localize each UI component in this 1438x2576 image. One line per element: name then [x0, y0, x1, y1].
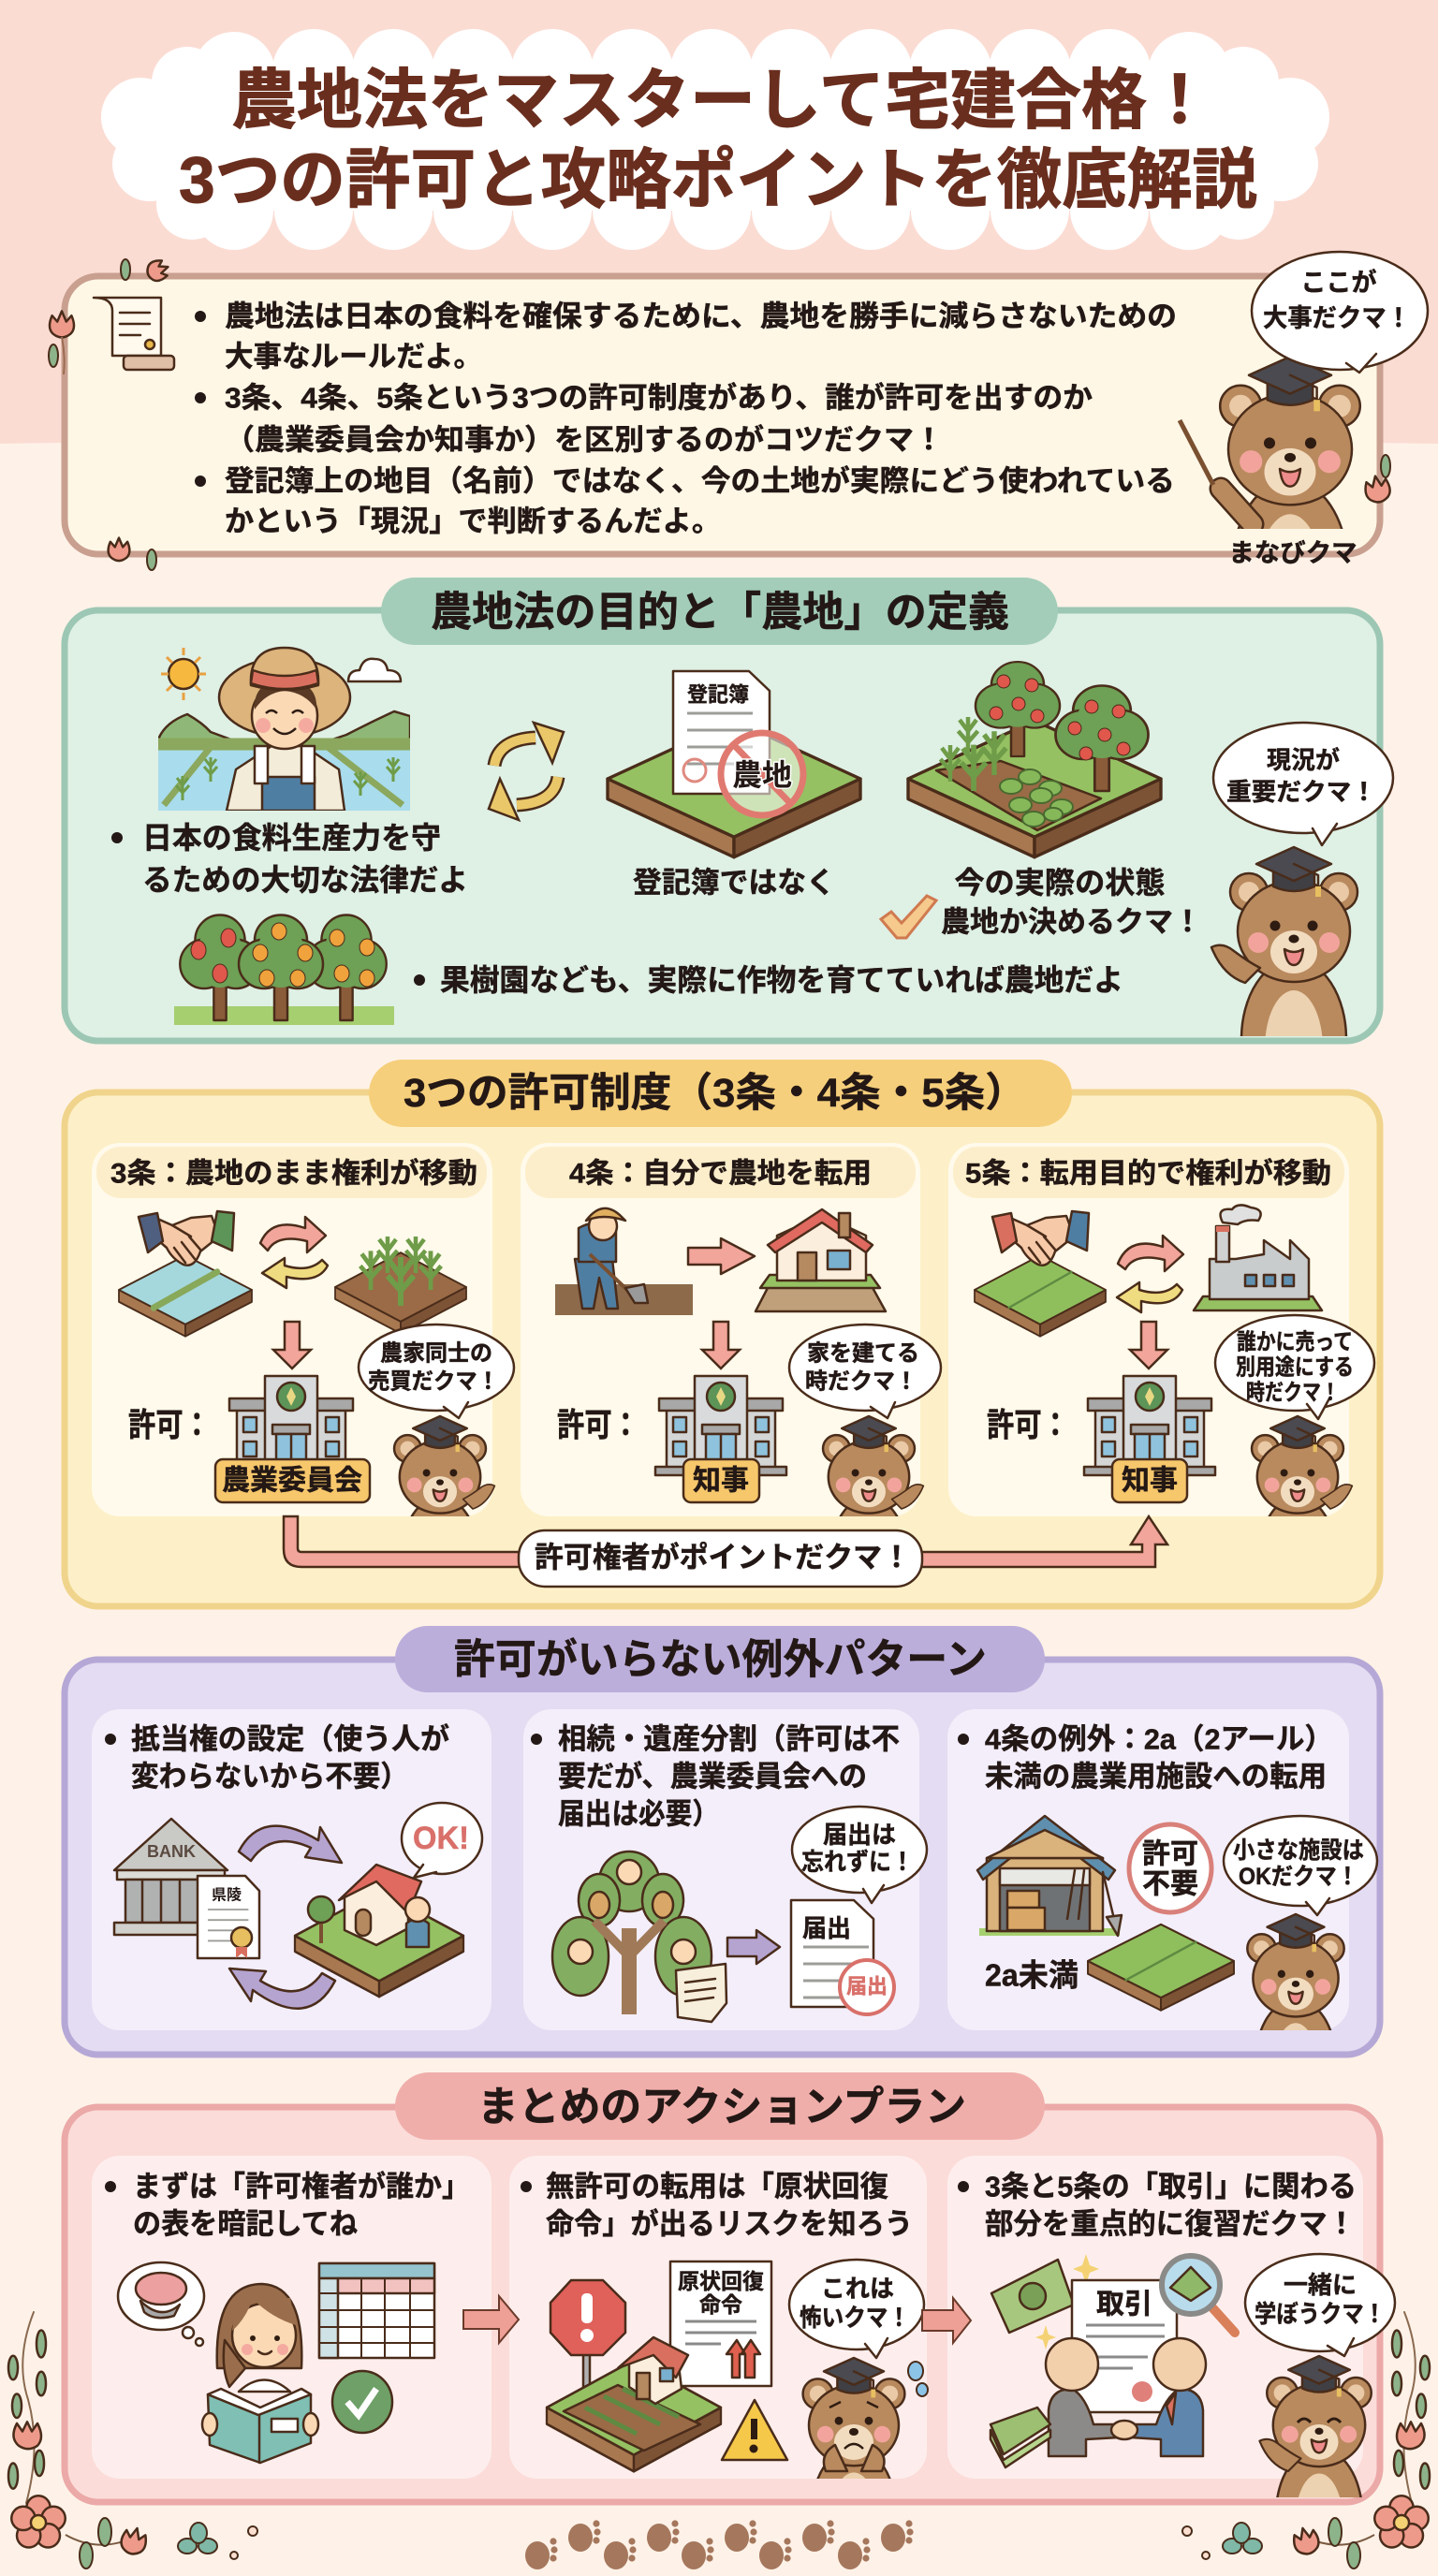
icon: order document [670, 2261, 771, 2386]
caption: actual state: 今の実際の状態 [955, 866, 1165, 900]
heading [369, 1060, 1072, 1127]
card heading: 3条：農地のまま権利が移動 [110, 1157, 477, 1189]
speech bubble: 怖いクマ！ [800, 2304, 910, 2332]
icon: registry document [673, 671, 770, 794]
bullet text [195, 300, 1177, 537]
card heading [96, 1147, 487, 1198]
heading [395, 2072, 1045, 2140]
heading: まとめのアクションプラン [477, 2084, 966, 2130]
icon: contract [1072, 2280, 1177, 2412]
icon: municipal building [226, 1376, 357, 1475]
callout pill [519, 1530, 922, 1587]
bullet text [105, 1722, 449, 1793]
icon: order document: 原状回復 [678, 2269, 764, 2293]
heading [395, 1626, 1045, 1692]
bullet: purpose: 日本の食料生産力を守 [142, 821, 441, 855]
badge: 農業委員会: 農業委員会 [222, 1466, 362, 1496]
bullet text [531, 1722, 900, 1831]
speech bubble: 誰かに売って [1237, 1329, 1353, 1355]
stamp: 許可不要: 不要 [1142, 1868, 1198, 1900]
illustration: small field [1088, 1925, 1234, 2011]
card: memorize table [92, 2156, 492, 2479]
panel: exceptions [62, 1626, 1384, 2057]
card heading [953, 1147, 1344, 1198]
icon: money stack [990, 2408, 1050, 2467]
speech bubble: OK: OK! [413, 1821, 469, 1856]
speech bubble: 現況が重要だクマ: 重要だクマ！ [1226, 778, 1376, 806]
no sign with 農地: 農地 [732, 758, 792, 792]
icon: certificate: 県陵 [212, 1887, 242, 1904]
decorative flowers [49, 257, 1392, 570]
caption: actual state: 農地か決めるクマ！ [941, 906, 1202, 938]
badge: 知事: 知事 [693, 1466, 749, 1496]
worried bear [801, 2357, 906, 2479]
pointer stick [1180, 420, 1213, 485]
decoration: right flowers [1182, 2496, 1429, 2569]
speech bubble [792, 1807, 927, 1903]
bullet text: の表を暗記してね [133, 2207, 358, 2241]
bullet text: 登記簿上の地目（名前）ではなく、今の土地が実際にどう使われている [225, 464, 1175, 498]
title cloud [101, 29, 1329, 250]
title text: 3つの許可と攻略ポイントを徹底解説 [179, 143, 1257, 216]
arrow right [727, 1930, 780, 1964]
illustration: house on land [295, 1865, 463, 1997]
bear waving [822, 1415, 925, 1516]
speech bubble: これは [821, 2275, 894, 2303]
icon: check mark [881, 896, 936, 938]
illustration: paddy transfer [119, 1211, 466, 1337]
speech bubble: 売買だクマ！ [368, 1368, 499, 1395]
card: article 5 [948, 1143, 1376, 1516]
icon: notification document: 届出 [802, 1914, 851, 1942]
smiling bear waving [1258, 2355, 1372, 2497]
bear [1246, 1913, 1345, 2030]
card heading [525, 1147, 916, 1198]
bullet text [521, 2170, 913, 2241]
decoration: left vine [8, 2312, 46, 2503]
card: mortgage [92, 1709, 492, 2030]
bullet: purpose: るための大切な法律だよ [142, 863, 468, 897]
speech bubble: ここが大事だクマ [1252, 252, 1428, 373]
mascot name: まなびクマ [1228, 539, 1357, 567]
arrow: step 1 to 2 [463, 2296, 519, 2343]
arrow: connecting permit authority [284, 1516, 1167, 1567]
icon: bank: BANK [147, 1842, 196, 1861]
icon: magnifier [1162, 2256, 1235, 2333]
icon: banknote [991, 2260, 1074, 2333]
bullet text: 命令」が出るリスクを知ろう [546, 2207, 913, 2241]
icon: registry document: 登記簿 [687, 683, 749, 706]
heading: 3つの許可制度（3条・4条・5条） [404, 1071, 1026, 1116]
callout pill: 許可権者がポイントだクマ！ [535, 1541, 911, 1574]
speech bubble: OK [402, 1803, 482, 1878]
icon: warning triangle [722, 2400, 787, 2460]
stamp: 許可不要 [1129, 1824, 1211, 1912]
caption: actual state [941, 866, 1202, 938]
card: article 4 [521, 1143, 942, 1516]
icon: notification document [791, 1900, 873, 2007]
illustration: two people shaking hands [1046, 2338, 1206, 2456]
bullet text: 要だが、農業委員会への [558, 1760, 867, 1793]
bullet text: 未満の農業用施設への転用 [985, 1760, 1327, 1793]
illustration: actual orchard land [908, 662, 1161, 857]
illustration: farmer [158, 648, 410, 811]
panel: introduction [48, 251, 1429, 571]
bullet text [105, 2170, 470, 2241]
speech bubble: OKだクマ！ [1239, 1864, 1358, 1890]
icon: prefectural building [1084, 1376, 1215, 1475]
permit label: 許可： [557, 1408, 639, 1443]
card: 2a exception [947, 1709, 1378, 2030]
speech bubble [1245, 2254, 1395, 2356]
bullet text: 変わらないから不要） [131, 1760, 408, 1793]
bullet text [958, 2170, 1357, 2241]
panel: action plan [8, 2072, 1430, 2576]
icon: bank [114, 1819, 228, 1935]
bear waving [1251, 1415, 1354, 1516]
speech bubble: 時だクマ！ [805, 1368, 917, 1395]
speech bubble: 小さな施設は [1233, 1837, 1364, 1864]
bullet text: 無許可の転用は「原状回復 [546, 2170, 888, 2203]
bullet text: 大事なルールだよ。 [225, 341, 482, 373]
card: article 3 [92, 1143, 515, 1516]
bear mascot waving [1210, 846, 1359, 1036]
bullet text [958, 1722, 1333, 1793]
decoration: paw prints [525, 2520, 914, 2569]
speech bubble: 現況が重要だクマ: 現況が [1267, 746, 1340, 774]
speech bubble [1224, 1816, 1377, 1915]
decoration: right vine [1392, 2312, 1430, 2503]
stamp [840, 1960, 894, 2014]
speech bubble: ここが大事だクマ: 大事だクマ！ [1263, 304, 1411, 332]
bullet text: かという「現況」で判断するんだよ。 [225, 505, 721, 537]
speech bubble: 時だクマ！ [1246, 1380, 1340, 1406]
bullet text: 相続・遺産分割（許可は不 [558, 1722, 900, 1756]
badge: 知事 [683, 1459, 759, 1502]
card: inheritance [523, 1709, 927, 2030]
icon: check circle [332, 2371, 392, 2433]
card heading: 4条：自分で農地を転用 [569, 1159, 872, 1189]
icon: sun and cloud [161, 648, 401, 700]
speech bubble: 届出は [823, 1821, 896, 1849]
icon: thought bubble with brain [118, 2262, 204, 2346]
arrow down [273, 1322, 311, 1368]
bullet text: 抵当権の設定（使う人が [131, 1722, 449, 1756]
icon: stop sign [550, 2280, 625, 2396]
bullet text: 4条の例外：2a（2アール） [985, 1722, 1333, 1756]
illustration: land with registry document [608, 671, 860, 857]
illustration: girl reading [202, 2284, 318, 2463]
heading [381, 578, 1058, 645]
badge: 知事: 知事 [1122, 1466, 1178, 1496]
speech bubble: ここが大事だクマ: ここが [1301, 268, 1376, 297]
label: 2a未満: 2a未満 [985, 1958, 1078, 1992]
bullet: purpose [111, 821, 468, 897]
permit label: 許可： [987, 1408, 1069, 1443]
badge: 知事 [1112, 1459, 1187, 1502]
bullet text: 3条、4条、5条という3つの許可制度があり、誰が許可を出すのか [225, 382, 1093, 414]
speech bubble: 一緒に [1284, 2271, 1357, 2299]
bullet text: 農地法は日本の食料を確保するために、農地を勝手に減らさないための [225, 300, 1177, 333]
stamp: 許可不要: 許可 [1142, 1838, 1198, 1870]
arrow down [702, 1322, 740, 1368]
decoration: left flowers [11, 2496, 257, 2569]
icon: table [319, 2263, 434, 2358]
illustration: farmer digging to house [555, 1208, 886, 1315]
illustration: family tree [552, 1852, 712, 2014]
panel: three permit systems [65, 1060, 1380, 1612]
speech bubble [1215, 1315, 1374, 1419]
icon: scroll [676, 1964, 726, 2022]
bullet: orchards: 果樹園なども、実際に作物を育てていれば農地だよ [440, 963, 1123, 997]
speech bubble: 学ぼうクマ！ [1255, 2300, 1386, 2328]
mascot bear with pointer [1210, 358, 1361, 529]
speech bubble [789, 2260, 924, 2358]
bullet text: まずは「許可権者が誰か」 [133, 2170, 470, 2203]
icon: prefectural building [655, 1376, 786, 1475]
illustration: fruit trees [174, 915, 394, 1025]
speech bubble: 家を建てる [807, 1340, 919, 1367]
title text: 農地法をマスターして宅建合格！ [231, 64, 1212, 137]
speech bubble: 忘れずに！ [801, 1848, 914, 1876]
arrows: cycle [229, 1826, 342, 2009]
panel: purpose and definition [62, 578, 1395, 1045]
badge: 農業委員会 [215, 1459, 370, 1502]
card: review [947, 2156, 1397, 2497]
arrow: step 2 to 3 [922, 2298, 971, 2343]
bullet text: 3条と5条の「取引」に関わる [985, 2170, 1357, 2203]
bullet text: （農業委員会か知事か）を区別するのがコツだクマ！ [225, 423, 944, 457]
speech bubble: 農家同士の [380, 1340, 492, 1367]
speech bubble [789, 1325, 941, 1418]
icon: certificate [198, 1876, 259, 1958]
permit label: 許可： [128, 1408, 211, 1443]
illustration: farm shed [977, 1816, 1122, 1936]
sweat drops [908, 2362, 928, 2396]
icon: contract: 取引 [1096, 2290, 1152, 2320]
card heading: 5条：転用目的で権利が移動 [965, 1157, 1331, 1189]
card: restoration order risk [509, 2156, 929, 2479]
speech bubble: 現況が重要だクマ [1213, 723, 1393, 845]
illustration: damaged house on field [547, 2337, 721, 2471]
heading: 許可がいらない例外パターン [454, 1636, 987, 1683]
bullet text: 部分を重点的に復習だクマ！ [985, 2207, 1356, 2241]
illustration: land to factory [975, 1205, 1322, 1337]
caption: registry: 登記簿ではなく [633, 867, 835, 899]
no sign with 農地 [721, 733, 803, 815]
icon: order document: 命令 [699, 2292, 742, 2317]
icon: cycle arrows [489, 723, 564, 820]
speech bubble: 別用途にする [1236, 1355, 1354, 1380]
arrow down [1130, 1322, 1167, 1368]
speech bubble [359, 1325, 514, 1418]
bullet text: 届出は必要） [558, 1797, 719, 1831]
icon: sparkles [1035, 2254, 1099, 2349]
heading: 農地法の目的と「農地」の定義 [431, 590, 1009, 635]
title text [179, 64, 1257, 216]
icon: scroll [94, 298, 174, 370]
stamp: 届出 [846, 1975, 888, 1998]
bear waving [393, 1415, 496, 1516]
